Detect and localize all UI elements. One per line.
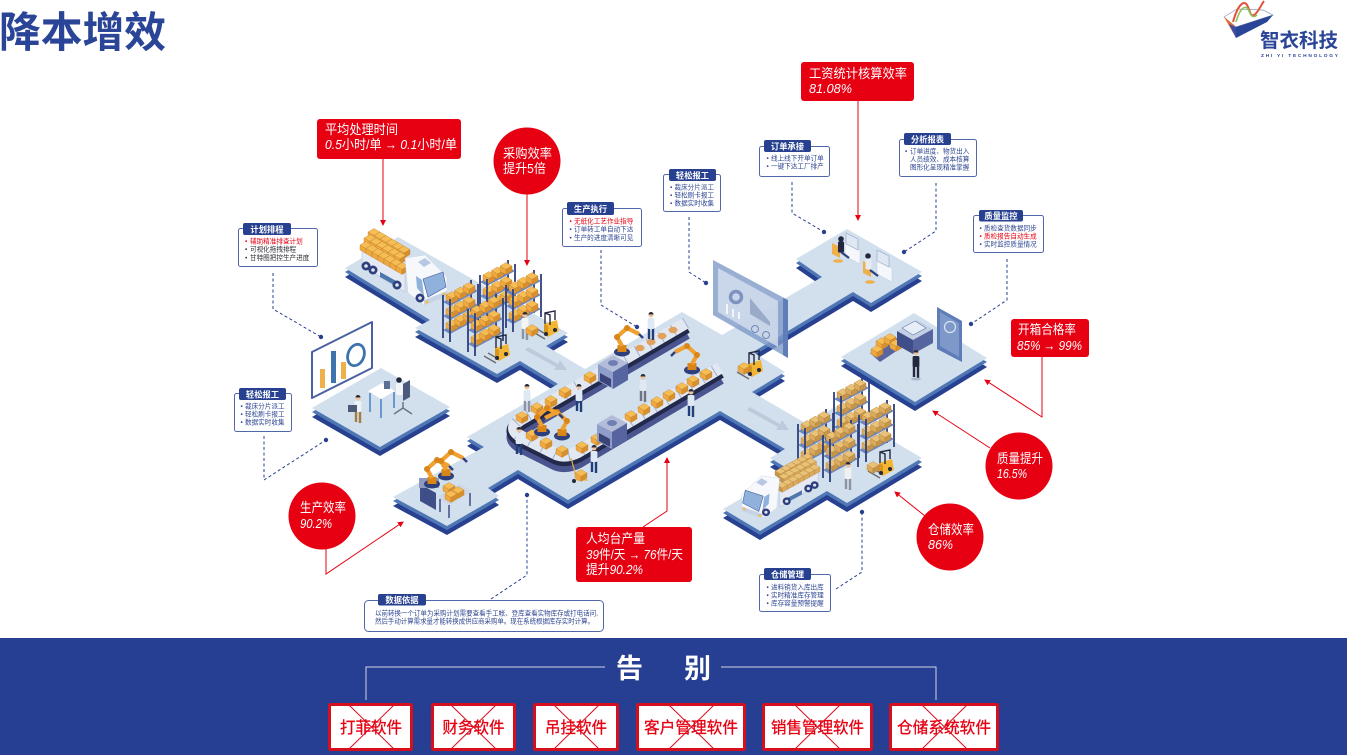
info box: easy reporting upper: •: [670, 184, 673, 191]
order office desks: [832, 233, 892, 284]
info box: production execution: 生产的进度清晰可见: [574, 233, 634, 242]
retired software: hanging system: [534, 704, 618, 750]
callout: box-opening pass rate: 开箱合格率: [1018, 322, 1076, 337]
callout: quality improvement: 16.5%: [997, 466, 1027, 481]
info box: easy reporting upper: •: [670, 192, 673, 200]
info box: quality monitoring: •: [980, 225, 982, 232]
info box: easy reporting lower: 数据实时收集: [245, 418, 285, 426]
robot cell platform: [419, 449, 472, 518]
callout: box-opening pass rate: 85% → 99%: [1017, 338, 1082, 353]
retired software: finance: 财务软件: [442, 719, 504, 737]
purchasing warehouse shelves: [443, 260, 559, 363]
callout: average processing time: 0.5小时/单 → 0.1小时/单: [325, 137, 457, 152]
info box: production execution: •: [570, 226, 572, 234]
callout: average processing time: [317, 119, 461, 225]
callout: production efficiency: 生产效率: [300, 500, 346, 515]
callout: payroll efficiency: 工资统计核算效率: [809, 66, 907, 81]
info box: data basis: [364, 493, 604, 632]
info box: analytics reports: 分析报表: [911, 134, 945, 144]
info box: easy reporting upper: [664, 169, 720, 285]
info box: quality monitoring: •: [980, 234, 982, 240]
retired software: CRM: [638, 704, 744, 750]
info box: warehouse management: •: [766, 584, 770, 591]
info box: data basis: 数据依据: [385, 595, 419, 605]
info box: quality monitoring: [969, 210, 1044, 326]
callout: warehouse efficiency: 86%: [928, 537, 953, 552]
info box: warehouse management: 库存容量预警提醒: [771, 598, 824, 608]
retired software: warehouse system: 仓储系统软件: [897, 719, 991, 737]
info box: easy reporting lower: •: [240, 403, 244, 410]
info box: analytics reports: 图形化呈现精准掌握: [910, 162, 970, 172]
info box: easy reporting lower: •: [240, 412, 244, 418]
production conveyor line: [514, 312, 720, 483]
retired software: warehouse system: [890, 704, 998, 750]
callout: output per station: 提升90.2%: [586, 562, 643, 577]
info box: order intake: 一键下达工厂排产: [771, 162, 824, 170]
info box: easy reporting lower: •: [240, 420, 244, 426]
info box: order intake: •: [766, 155, 770, 162]
office platform with chart board: [312, 322, 412, 423]
retired software: hanging system: 吊挂软件: [545, 719, 607, 737]
truck at receiving platform: [360, 228, 447, 305]
callout: output per station: 39件/天 → 76件/天: [586, 547, 683, 562]
info box: production execution: •: [570, 218, 572, 225]
info box: quality monitoring: 质检查货数据同步: [984, 223, 1037, 232]
info box: planning schedule: •: [245, 246, 248, 254]
info box: production execution: 订单转工单自动下达: [574, 224, 634, 234]
retired software: CRM: 客户管理软件: [644, 719, 738, 737]
callout: box-opening pass rate: [985, 319, 1089, 417]
info box: warehouse management: 进料销货入库出库: [771, 582, 824, 591]
callout: purchasing efficiency: 采购效率: [503, 146, 552, 161]
info box: easy reporting lower: 轻松刷卡报工: [245, 410, 285, 418]
info box: data basis: 以前转换一个订单为采购计划需要查看手工帐、登库查看实物库存或打电话问,: [375, 608, 598, 617]
retired software: sales management: [764, 704, 872, 750]
info box: easy reporting upper: •: [670, 200, 673, 208]
retired software: sales management: 销售管理软件: [771, 719, 864, 737]
info box: easy reporting lower: 轻松报工: [246, 390, 279, 400]
info box: production execution: •: [570, 235, 572, 242]
info box: production execution: [562, 202, 642, 329]
info box: analytics reports: 人员绩效、成本核算: [910, 154, 970, 164]
info box: production execution: 无纸化工艺作业指导: [574, 216, 634, 225]
info box: easy reporting upper: 轻松报工: [676, 170, 709, 180]
info box: warehouse management: 仓储管理: [771, 570, 805, 580]
company logo: ZHI YI TECHNOLOGY: [1261, 53, 1339, 59]
farewell banner: [0, 638, 1347, 755]
info box: planning schedule: •: [245, 255, 248, 262]
banner heading: 别: [684, 654, 711, 684]
info box: order intake: 订单承接: [771, 142, 805, 152]
info box: warehouse management: 实时精准库存管理: [771, 590, 824, 600]
info box: warehouse management: •: [766, 592, 770, 600]
info box: production execution: 生产执行: [574, 204, 607, 214]
info box: planning schedule: 辅助精准排查计划: [250, 236, 303, 245]
callout: output per station: 人均台产量: [586, 531, 645, 546]
quality check station: [870, 307, 962, 380]
info box: order intake: 线上线下开单订单: [771, 153, 824, 162]
banner heading: [616, 654, 711, 684]
callout: average processing time: 平均处理时间: [325, 122, 398, 137]
title: 降本增效: [0, 9, 166, 56]
callout: production efficiency: [288, 482, 403, 574]
callout: warehouse efficiency: 仓储效率: [928, 522, 974, 537]
callout: warehouse efficiency: [895, 492, 984, 570]
info box: quality monitoring: 质检报告自动生成: [984, 232, 1037, 240]
info box: order intake: •: [766, 164, 770, 170]
callout: purchasing efficiency: [494, 128, 560, 265]
info box: quality monitoring: 质量监控: [984, 211, 1018, 221]
callout: production efficiency: 90.2%: [300, 516, 332, 531]
info box: planning schedule: 可视化拖拽排程: [250, 244, 297, 254]
info box: planning schedule: 甘特图把控生产进度: [250, 253, 310, 262]
retired software: bundle ticket: [330, 704, 412, 750]
info box: easy reporting lower: [234, 388, 328, 480]
callout: quality improvement: 质量提升: [997, 451, 1043, 466]
info box: quality monitoring: •: [980, 242, 982, 248]
retired software: bundle ticket: 打菲软件: [340, 719, 402, 737]
company logo: [1224, 1, 1339, 59]
company logo: 智衣科技: [1260, 29, 1338, 52]
info box: planning schedule: 计划排程: [250, 224, 284, 234]
info box: data basis: 然后手动计算需求量才能转换成供应商采购单。现在系统根据库存实时计算。: [375, 616, 594, 626]
banner heading: 告: [616, 654, 643, 684]
retired software: finance: [432, 704, 514, 750]
callout: payroll efficiency: [801, 62, 914, 220]
info box: analytics reports: 订单进度、物货出入: [910, 146, 970, 155]
info box: easy reporting upper: 轻松刷卡报工: [674, 190, 714, 200]
warehouse truck and shelves: [742, 377, 894, 518]
info box: easy reporting upper: 数据实时收集: [674, 198, 714, 208]
info box: quality monitoring: 实时监控质量情况: [984, 240, 1037, 248]
callout: purchasing efficiency: 提升5倍: [503, 161, 546, 176]
info box: analytics reports: •: [905, 148, 908, 155]
info box: analytics reports: [900, 133, 976, 254]
info box: easy reporting upper: 裁床分片派工: [674, 182, 714, 191]
info box: easy reporting lower: 裁床分片派工: [245, 401, 285, 410]
info box: planning schedule: •: [245, 238, 248, 245]
transparent dashboard monitor: [713, 260, 788, 358]
callout: output per station: [576, 458, 692, 582]
callout: quality improvement: [933, 411, 1052, 500]
info box: planning schedule: [238, 223, 323, 339]
isometric factory floor: [312, 229, 987, 540]
callout: payroll efficiency: 81.08%: [809, 81, 852, 96]
info box: order intake: [760, 140, 830, 234]
info box: warehouse management: [760, 510, 864, 612]
forklift by main line: [737, 351, 763, 379]
info box: warehouse management: •: [766, 600, 770, 608]
